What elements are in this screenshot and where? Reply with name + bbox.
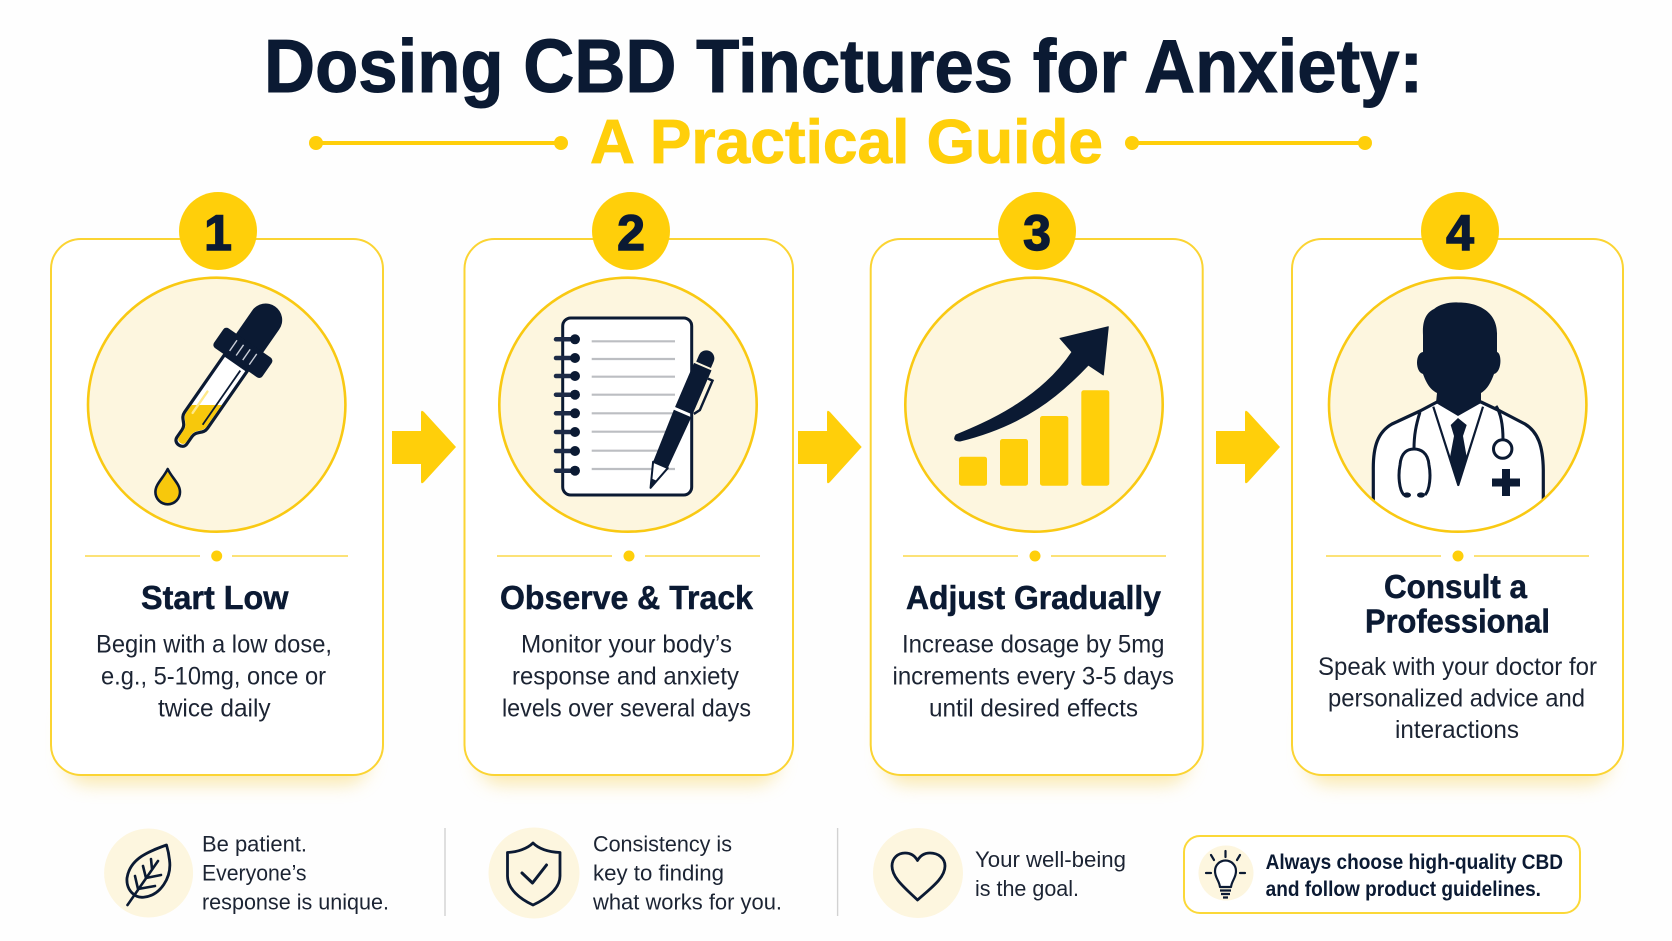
heading: Professional: [1365, 602, 1550, 640]
body text: Speak with your doctor for: [1318, 653, 1597, 681]
body text: Increase dosage by 5mg: [902, 631, 1164, 659]
text: [592, 832, 782, 914]
number badge 3: 3: [1023, 205, 1051, 261]
text: Always choose high-quality CBD: [1266, 851, 1563, 874]
number badge 1: [179, 192, 257, 270]
icon: notebook and pen: [499, 278, 757, 532]
heading: Consult a: [1384, 568, 1528, 605]
divider: [903, 550, 1166, 562]
body text: levels over several days: [502, 695, 751, 723]
subtitle with connector lines: A Practical Guide: [590, 108, 1103, 177]
text: key to finding: [593, 861, 724, 886]
body text: increments every 3-5 days: [892, 663, 1174, 691]
panel: step 1 start low: [51, 192, 383, 784]
icon: dropper: [88, 278, 345, 532]
title: Dosing CBD Tinctures for Anxiety:: [264, 24, 1423, 108]
number badge 4: [1421, 192, 1499, 270]
text: Consistency is: [593, 832, 732, 857]
heading: Start Low: [141, 579, 289, 616]
icon: leaf: [104, 828, 193, 918]
text: Everyone’s: [202, 861, 306, 886]
text: Your well-being: [975, 847, 1126, 872]
number badge 3: [998, 192, 1076, 270]
body text: twice daily: [158, 695, 271, 723]
body text: response and anxiety: [512, 663, 739, 691]
divider: [85, 550, 348, 562]
callout: quality reminder: [1184, 836, 1580, 913]
divider: [497, 550, 760, 562]
body text: until desired effects: [929, 695, 1138, 723]
text: what works for you.: [592, 889, 782, 914]
heading: [1365, 568, 1550, 640]
panel: step 2 observe and track: [464, 192, 793, 784]
number badge 1: 1: [204, 205, 232, 261]
text: response is unique.: [202, 889, 389, 914]
body text: Monitor your body’s: [521, 631, 732, 659]
icon: light bulb: [1198, 846, 1254, 900]
icon: doctor: [1329, 278, 1586, 560]
arrow 2 to 3: [798, 411, 862, 483]
body text: [1318, 653, 1597, 744]
tip: well-being: [873, 828, 1126, 918]
arrow 3 to 4: [1216, 411, 1280, 483]
body text: personalized advice and: [1328, 685, 1585, 713]
icon: heart: [873, 828, 963, 918]
text: [1266, 851, 1563, 901]
icon: rising bars and arrow: [905, 278, 1163, 532]
text: [202, 832, 389, 914]
heading: Observe & Track: [500, 579, 754, 616]
body text: Begin with a low dose,: [96, 631, 332, 659]
number badge 2: [592, 192, 670, 270]
body text: [502, 631, 751, 723]
text: [975, 847, 1126, 901]
panel: step 4 consult a professional: [1292, 192, 1623, 784]
body text: e.g., 5-10mg, once or: [101, 663, 326, 691]
text: and follow product guidelines.: [1266, 878, 1541, 901]
body text: interactions: [1395, 716, 1519, 744]
body text: [892, 631, 1174, 723]
tip: be patient: [104, 828, 389, 918]
heading: Adjust Gradually: [906, 579, 1162, 616]
panel: step 3 adjust gradually: [871, 192, 1203, 784]
body text: [96, 631, 332, 723]
text: is the goal.: [975, 876, 1079, 901]
arrow 1 to 2: [392, 411, 456, 483]
number badge 2: 2: [617, 205, 645, 261]
subtitle with connector lines: [309, 108, 1372, 177]
number badge 4: 4: [1446, 205, 1474, 261]
tip: consistency: [488, 828, 782, 918]
icon: shield with check: [488, 828, 580, 918]
text: Be patient.: [202, 832, 307, 857]
divider: [1326, 550, 1589, 562]
